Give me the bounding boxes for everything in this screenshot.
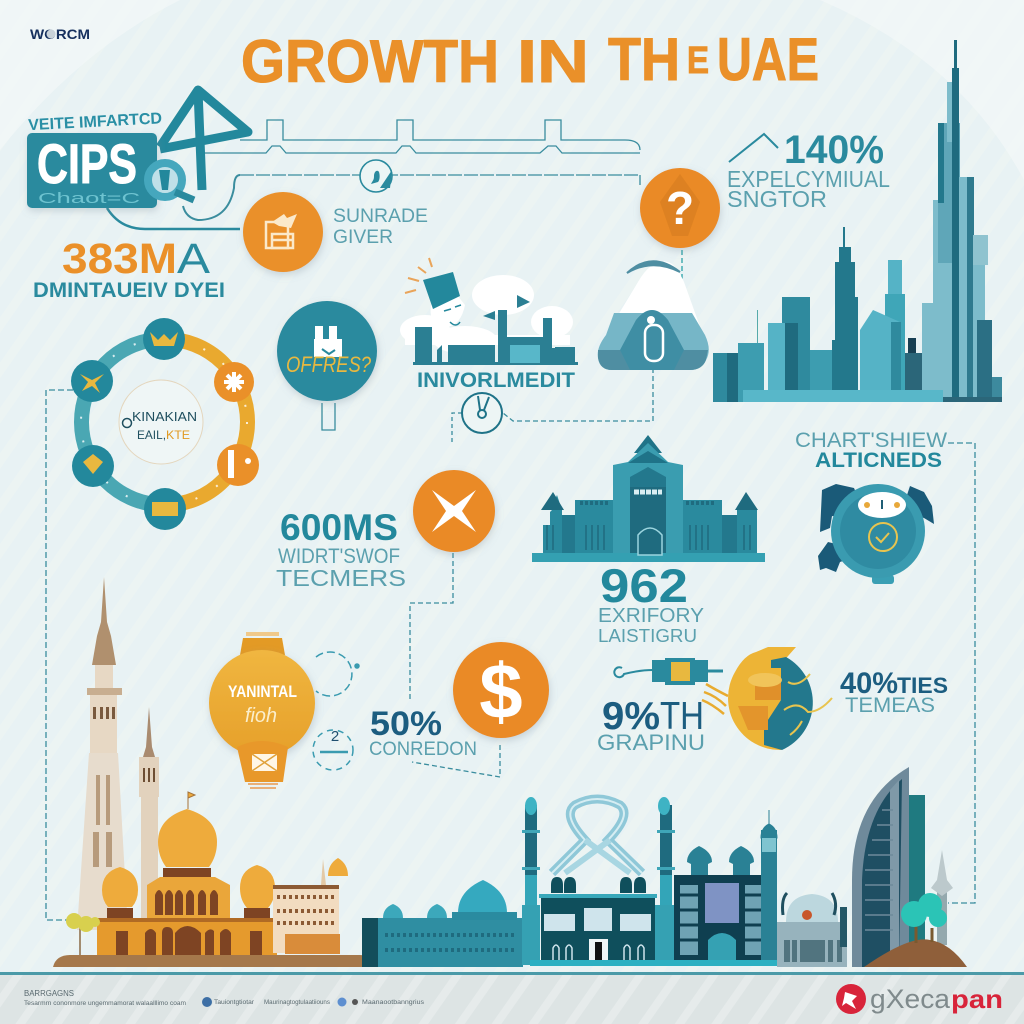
domes	[102, 867, 138, 907]
ring node upper right	[214, 362, 254, 402]
panel: CIPS badge	[27, 90, 248, 208]
stat: 383MA: 383M	[62, 235, 177, 283]
footer text	[24, 989, 425, 1007]
illustration: left minaret and golden mosque	[66, 577, 348, 955]
text: chart review	[795, 429, 947, 472]
stat caption: WIDRT'SWOF	[278, 545, 400, 568]
stat: 50% confidence: 50%	[370, 705, 442, 743]
ring node lower right	[217, 444, 259, 486]
label: INIVORLMEDIT	[417, 369, 575, 392]
icon: A-frame mast	[160, 90, 248, 190]
text: sunrade giver	[333, 206, 428, 248]
stat: 962	[598, 559, 704, 646]
clock tower	[761, 830, 777, 962]
chart: ring diagram	[71, 318, 259, 530]
footer logo: gXeca	[870, 984, 951, 1014]
badge subtext: Chaot=C	[38, 190, 140, 207]
heading: badge caption: VEITE IMFARTCD	[28, 110, 162, 134]
illustration: central teal mosque skyline	[362, 797, 847, 967]
mosque body	[147, 877, 230, 920]
dome drums	[107, 868, 270, 918]
ring node top	[143, 318, 185, 360]
person head	[405, 258, 465, 327]
icon: question mark circle: ?	[666, 182, 694, 234]
footer logo: pan	[951, 984, 1003, 1014]
title: TH	[608, 26, 680, 93]
stat: 600MS: 600MS	[280, 507, 398, 548]
footer text: Maanaootbanngrius	[362, 999, 425, 1006]
stat caption: EXPELCYMIUAL	[727, 166, 890, 192]
badge box	[27, 133, 157, 208]
icon: dashed arcs	[313, 652, 359, 770]
ring centre label: KINAKIAN	[132, 409, 197, 424]
connector lines	[46, 120, 975, 920]
tree	[66, 913, 100, 955]
stat: 140%	[727, 128, 890, 212]
footer logo	[836, 984, 1003, 1014]
footer	[0, 972, 1024, 1024]
illustration: arch tent	[598, 261, 709, 370]
logo: top left: WORCM	[30, 26, 90, 42]
second building	[674, 875, 769, 962]
icon: gold medallion	[209, 632, 315, 788]
icon: dollar circle: $	[479, 647, 523, 735]
stat caption: GRAPINU	[597, 730, 705, 755]
icon: magnifier Q	[148, 163, 194, 200]
icon: teal OFFRES circle: OFFRES?	[286, 352, 372, 377]
ring centre label: EAIL,	[137, 428, 166, 442]
stat: 962: 962	[600, 559, 688, 612]
left minaret tower	[522, 797, 540, 965]
base strip	[530, 960, 777, 966]
icon: gold medallion: fioh	[245, 705, 277, 727]
stat: 9%TH: 9%	[602, 695, 660, 738]
text: chart review: CHART'SHIEW	[795, 429, 947, 452]
stat: 140%: 140%	[784, 128, 884, 172]
footer icons	[202, 997, 212, 1007]
footer text: Maurinagtogtulaatiiouns	[264, 999, 331, 1006]
twin domes	[687, 846, 754, 875]
clouds	[400, 275, 573, 354]
envelope	[252, 754, 277, 771]
stat: 40%: 40%	[840, 667, 898, 700]
ring centre label: KTE	[166, 428, 190, 442]
icon: dollar circle	[453, 642, 549, 738]
hill	[864, 939, 967, 967]
main hall	[539, 894, 657, 898]
grey building	[777, 893, 847, 967]
title: IN	[517, 28, 589, 95]
ring centre label	[119, 380, 203, 464]
stat: 600MS: TECMERS	[276, 565, 406, 591]
icon: split globe	[728, 647, 832, 750]
comms tower	[931, 850, 953, 945]
title	[241, 26, 819, 95]
stat caption: CONREDON	[369, 739, 477, 760]
stat caption: EXRIFORY	[598, 605, 704, 627]
illustration: domed palace	[532, 435, 765, 562]
ring node bottom	[144, 488, 186, 530]
icon: globe with splash	[818, 484, 934, 584]
title: GROWTH	[241, 28, 499, 95]
stat: 40%	[840, 667, 948, 717]
text: sunrade giver: SUNRADE	[333, 206, 428, 227]
icon: clock	[462, 393, 502, 433]
stat: 962: LAISTIGRU	[598, 626, 697, 646]
stat: 383MA	[33, 235, 225, 302]
illustration: puzzle piece connector	[614, 658, 728, 714]
ribbon	[552, 799, 642, 873]
stat: 9%TH: TH	[660, 695, 704, 738]
stat: 40%: TIES	[897, 673, 948, 698]
badge text: CIPS	[37, 132, 137, 195]
ground strip: sand platform	[53, 955, 380, 967]
icon: question mark circle	[640, 168, 720, 248]
stat caption: DMINTAUEIV DYEI	[33, 279, 225, 302]
right minaret tower	[655, 797, 675, 965]
icon: orange document circle	[243, 192, 323, 272]
footer text: Tauiontgtiotar	[214, 999, 255, 1006]
illustration: right skyscraper skyline	[713, 40, 1002, 402]
text: sunrade giver: GIVER	[333, 227, 393, 248]
trees	[901, 893, 947, 943]
stat: 9%TH	[597, 695, 705, 755]
small minaret	[143, 707, 155, 757]
icon: dashed arcs: 2	[331, 728, 339, 745]
footer text: Tesarmrn cononmore ungemmamorat walaalllimo coam	[24, 1000, 186, 1007]
domes on roof	[551, 877, 646, 893]
title: E	[687, 40, 709, 82]
factory	[413, 310, 578, 365]
ring node lower left	[72, 445, 114, 487]
stat: 140%: SNGTOR	[727, 186, 827, 212]
stat: 600MS	[276, 507, 406, 591]
icon: teal OFFRES circle	[277, 301, 377, 401]
illustration: right curved tower and trees	[852, 767, 967, 967]
icon: small person medallion	[360, 160, 392, 192]
footer text: BARRGAGNS	[24, 989, 74, 998]
medallion text: YANINTAL	[228, 682, 297, 701]
title: UAE	[717, 26, 819, 93]
stat: 50% confidence	[369, 705, 477, 760]
icon: orange cross circle	[413, 470, 495, 552]
ring node upper left	[71, 360, 113, 402]
stat: 383MA: A	[177, 235, 210, 283]
illustration: person and factory	[400, 258, 578, 392]
text: chart review: ALTICNEDS	[815, 449, 942, 472]
stat caption: TEMEAS	[845, 694, 935, 717]
